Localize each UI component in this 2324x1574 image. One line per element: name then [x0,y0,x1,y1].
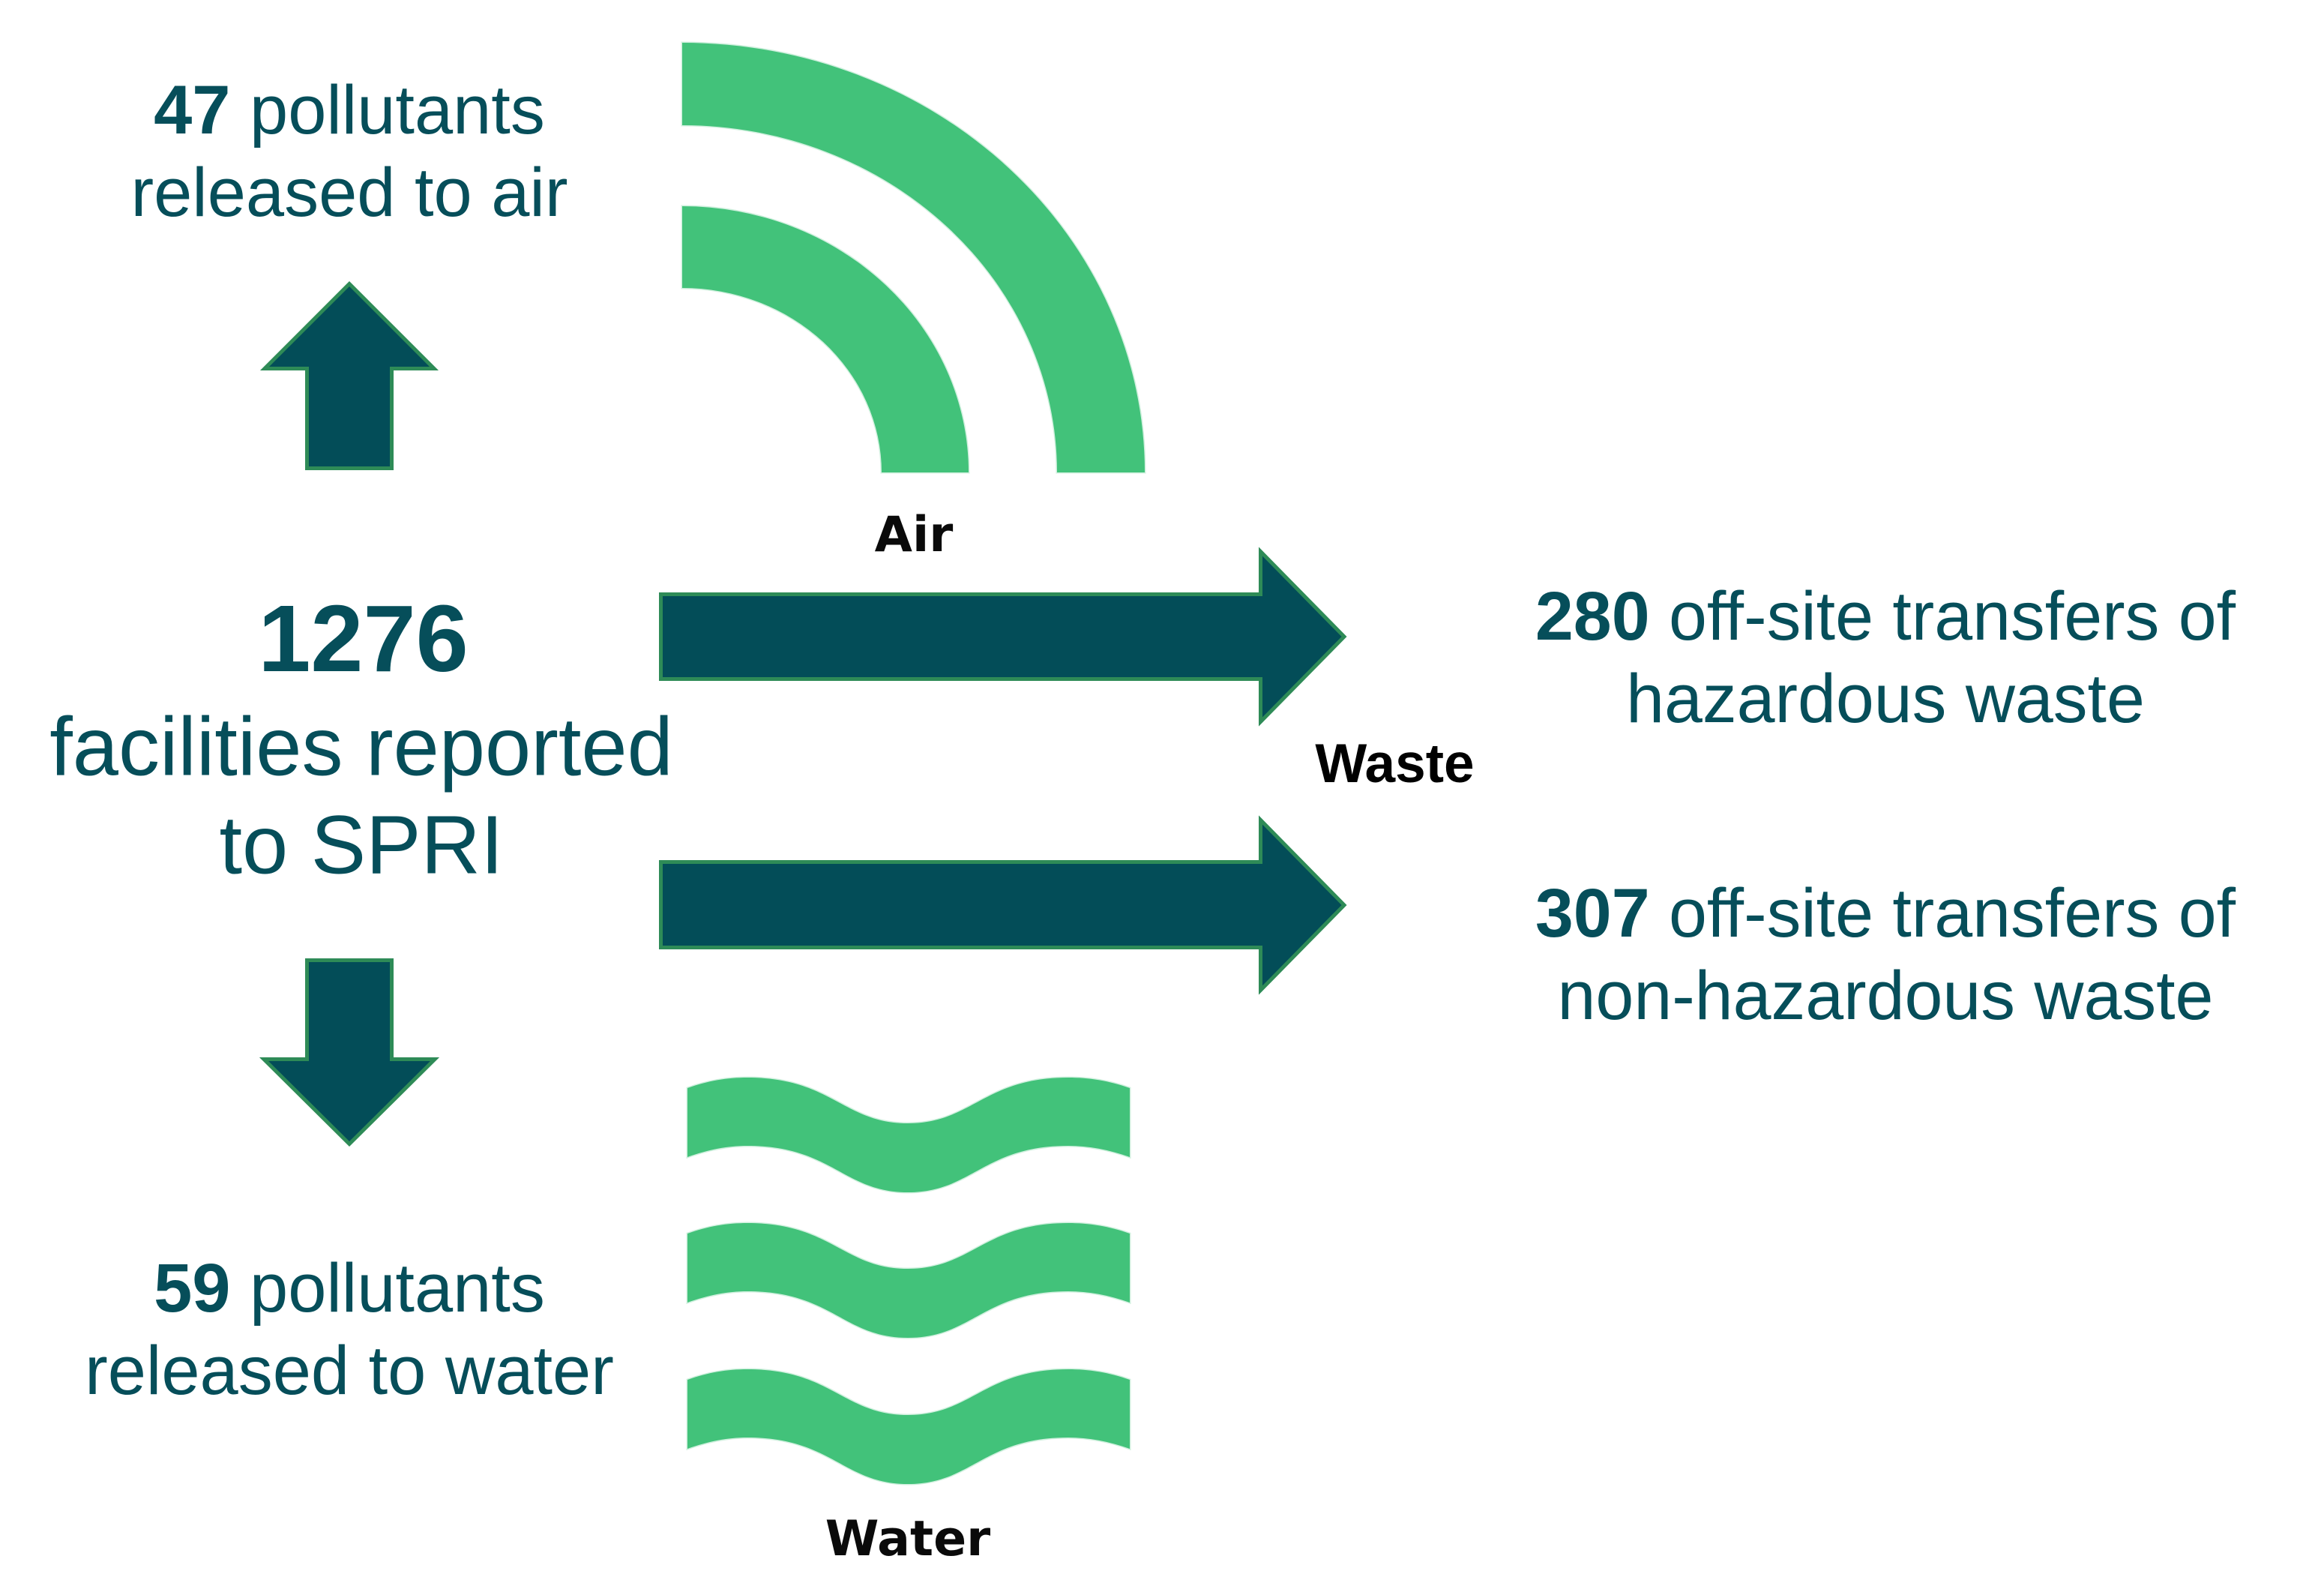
text: hazardous waste transfers: hazardous waste [1626,661,2145,737]
label: Air: Air [875,507,953,563]
text: pollutants released to water: 59 pollutants [154,1250,545,1327]
label: Water: Water [825,1511,990,1567]
text: non-hazardous waste transfers: 307 off-site transfers of [1535,875,2236,952]
text: 1276 facilities reported to SPRI: facilities reported [49,700,673,793]
icon: water waves [687,1078,1130,1484]
text: 1276 facilities reported to SPRI [49,586,673,891]
text: 1276 facilities reported to SPRI: 1276 [258,586,469,691]
text: hazardous waste transfers: 280 off-site transfers of [1535,578,2236,655]
text: pollutants released to water: released to water [85,1333,614,1409]
text: 1276 facilities reported to SPRI: to SPRI [219,799,504,891]
arrow: to hazardous waste [661,552,1344,721]
text: pollutants released to air: released to air [130,154,568,231]
icon: air arcs [682,43,1145,472]
arrow: to non-hazardous waste [661,820,1344,990]
label: Waste: Waste [1315,733,1475,794]
text: pollutants released to air: 47 pollutants [154,72,545,148]
text: non-hazardous waste transfers: non-hazardous waste [1558,958,2213,1034]
arrow: down to water [264,960,435,1144]
arrow: up to air [265,283,434,468]
